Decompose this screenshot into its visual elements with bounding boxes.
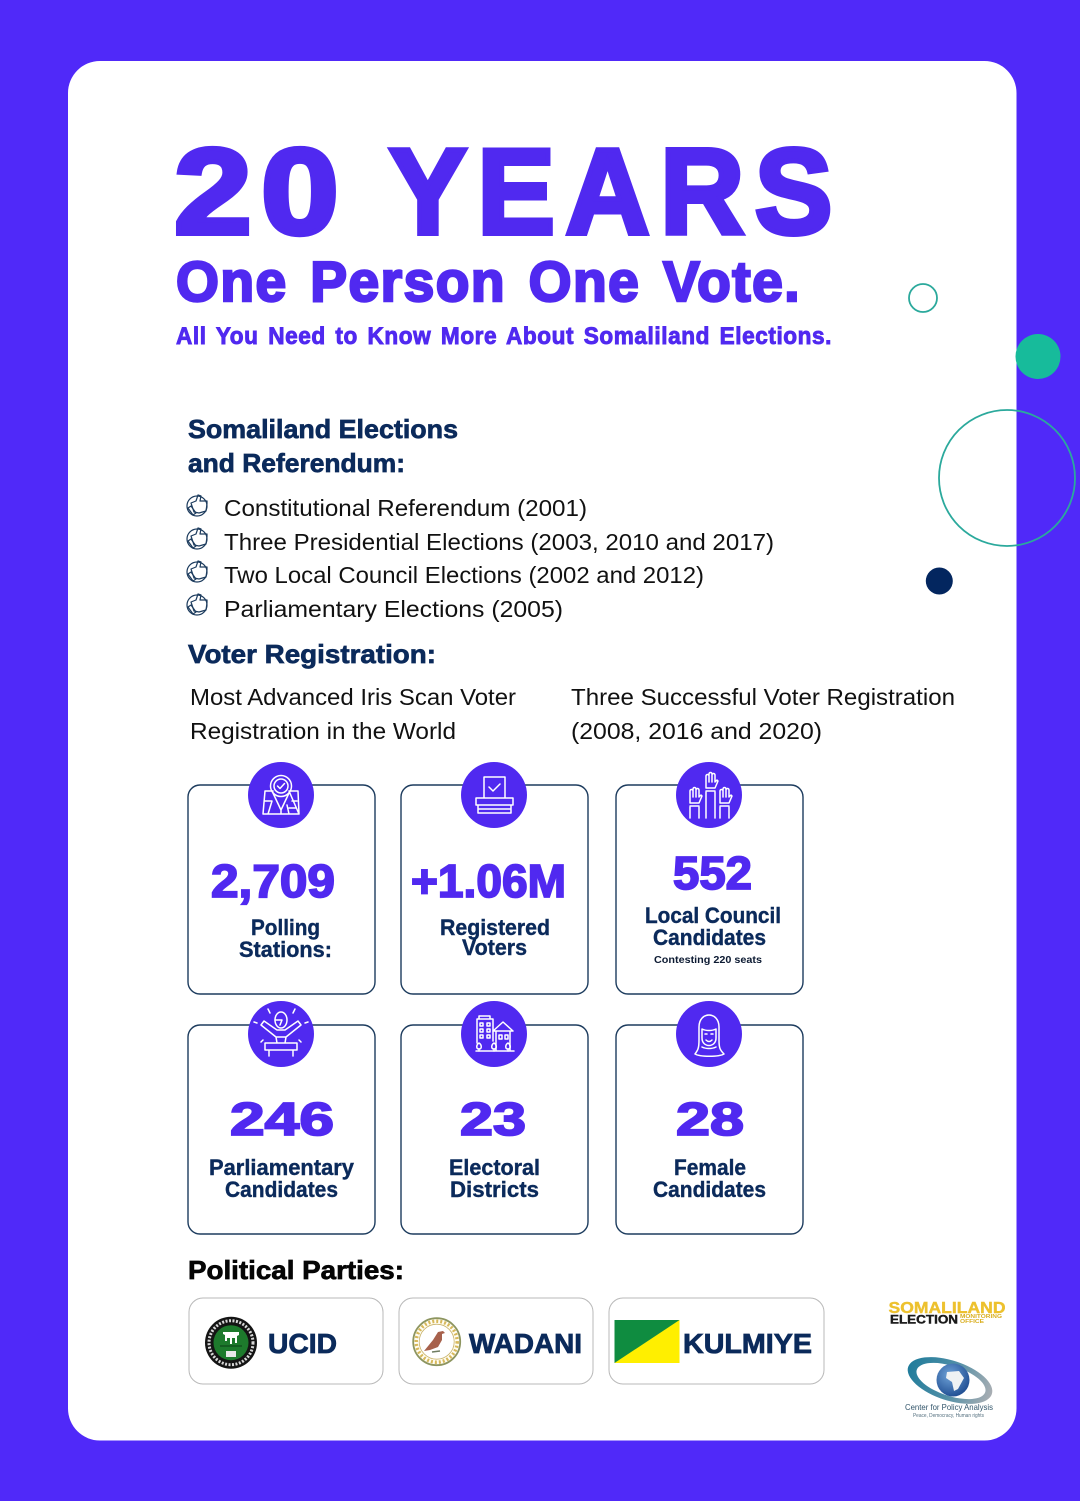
heading: voter registration: Voter Registration: [188, 639, 436, 669]
stat card: registered voters: Registered [440, 915, 550, 940]
logo: Somaliland Election Monitoring Office: SOMALILAND [888, 1300, 1006, 1317]
stat card: polling stations [188, 762, 375, 994]
stat card: local council candidates: Contesting 220 seats [654, 954, 762, 966]
logo: Somaliland Election Monitoring Office: ELECTION [890, 1314, 958, 1326]
heading: elections and referendum: and Referendum: [188, 448, 405, 478]
voter registration text left [190, 684, 516, 744]
stat card: electoral districts: Districts [450, 1177, 539, 1202]
logo: Center for Policy Analysis: Peace, Democracy, Human rights [913, 1413, 984, 1419]
heading: elections and referendum [188, 414, 458, 478]
stat card: registered voters: Voters [462, 935, 527, 960]
voter registration text right: Three Successful Voter Registration [571, 684, 955, 710]
subtitle: One Person One Vote. [176, 250, 801, 313]
stat card: registered voters: +1.06M [411, 855, 566, 907]
voter registration text left: Most Advanced Iris Scan Voter [190, 684, 516, 710]
stat card: local council candidates [616, 762, 803, 994]
logo: Center for Policy Analysis [902, 1348, 998, 1419]
elections list: Two Local Council Elections (2002 and 2012) [224, 562, 704, 588]
stat card: female candidates: Candidates [653, 1177, 766, 1202]
icon: woman in hijab [695, 1015, 724, 1056]
stat card: polling stations: Stations: [239, 937, 332, 962]
stat card: local council candidates: Candidates [653, 925, 766, 950]
party: WADANI: WADANI [469, 1328, 582, 1359]
heading: political parties: Political Parties: [188, 1255, 404, 1285]
voter registration text left: Registration in the World [190, 718, 456, 744]
stat card: registered voters [401, 762, 588, 994]
stat card: female candidates: Female [674, 1155, 746, 1180]
elections list [187, 495, 774, 622]
icon: map pin [263, 776, 299, 814]
logo: UCID seal [205, 1317, 257, 1369]
stat card: local council candidates: 552 [673, 847, 752, 899]
party: KULMIYE: KULMIYE [683, 1328, 812, 1359]
elections list: Three Presidential Elections (2003, 2010 and 2017) [224, 529, 774, 555]
icon: speaker at podium [254, 1009, 308, 1056]
logo: KULMIYE flag [614, 1320, 680, 1363]
party: WADANI [399, 1298, 593, 1384]
stat card: polling stations: 2,709 [211, 855, 335, 907]
logo: Somaliland Election Monitoring Office: OFFICE [960, 1319, 985, 1325]
party: UCID [189, 1298, 383, 1384]
heading: elections and referendum: Somaliland Elections [188, 414, 458, 444]
tagline: All You Need to Know More About Somaliland Elections. [176, 323, 832, 350]
logo: WADANI emblem [413, 1318, 460, 1365]
stat card: parliamentary candidates [188, 1001, 375, 1234]
logo: Somaliland Election Monitoring Office: MONITORING [960, 1314, 1002, 1320]
stat card: polling stations: Polling [251, 915, 320, 940]
stat card: parliamentary candidates: Parliamentary [209, 1155, 355, 1180]
voter registration text right [571, 684, 955, 744]
elections list: Parliamentary Elections (2005) [224, 596, 563, 622]
logo: Somaliland Election Monitoring Office [888, 1300, 1006, 1326]
icon: buildings [476, 1016, 514, 1051]
title: YEARS [389, 124, 843, 260]
stat card: female candidates [616, 1001, 803, 1234]
stat card: female candidates: 28 [676, 1093, 744, 1145]
title [174, 124, 843, 260]
voter registration text right: (2008, 2016 and 2020) [571, 718, 822, 744]
stat card: electoral districts: 23 [460, 1093, 526, 1145]
title: 20 [174, 124, 348, 260]
icon: ballot box [476, 777, 513, 813]
elections list: Constitutional Referendum (2001) [224, 495, 587, 521]
stat card: electoral districts: Electoral [449, 1155, 540, 1180]
stat card: parliamentary candidates: 246 [230, 1093, 334, 1145]
decorative circles [909, 284, 1075, 594]
stat card: electoral districts [401, 1001, 588, 1234]
party: KULMIYE [609, 1298, 824, 1384]
party: UCID: UCID [268, 1328, 337, 1359]
logo: Center for Policy Analysis: Center for Policy Analysis [905, 1402, 993, 1412]
icon: raised hands [690, 772, 732, 818]
stat card: parliamentary candidates: Candidates [225, 1177, 338, 1202]
stat card: local council candidates: Local Council [645, 903, 781, 928]
